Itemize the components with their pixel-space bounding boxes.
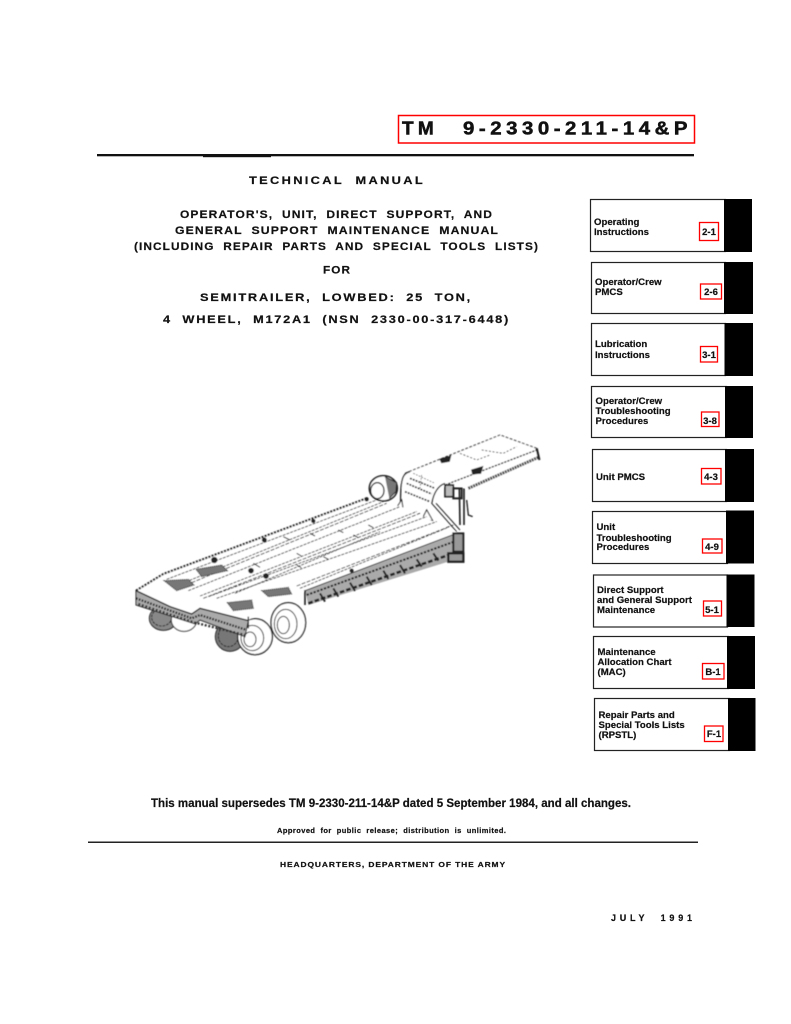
tab: operator/crew PMCS: 2-6 — [704, 287, 718, 298]
manual title: FOR — [323, 264, 351, 276]
tab: lubrication instructions — [592, 323, 753, 376]
deck fittings and wheel wells — [164, 498, 368, 611]
tab: repair parts and special tools lists: Special Tools Lists — [598, 720, 685, 731]
vehicle designation — [163, 292, 510, 326]
tab: operator/crew troubleshooting — [592, 386, 753, 438]
manual title: GENERAL SUPPORT MAINTENANCE MANUAL — [175, 225, 499, 237]
footer rule — [88, 842, 698, 843]
tab: unit troubleshooting — [592, 510, 754, 564]
gooseneck — [395, 435, 539, 532]
document number: 9-2330-211-14&P — [463, 118, 692, 138]
header rule — [97, 154, 694, 157]
tab: direct support and general support: Maintenance — [597, 605, 655, 616]
manual title: OPERATOR'S, UNIT, DIRECT SUPPORT, AND — [180, 209, 493, 221]
supersession notice: This manual supersedes TM 9-2330-211-14&P dated 5 September 1984, and all changes. — [151, 798, 631, 810]
tab: maintenance allocation chart: Maintenance — [598, 647, 656, 658]
document number: TM — [402, 118, 438, 138]
manual title — [134, 209, 539, 276]
document number — [398, 116, 694, 143]
tab: unit troubleshooting: Procedures — [596, 542, 649, 553]
tab: operator/crew troubleshooting: Troubleshooting — [596, 406, 671, 417]
illustration: lowbed semitrailer — [136, 435, 539, 655]
tab: unit PMCS — [592, 449, 754, 502]
vehicle designation: 4 WHEEL, M172A1 (NSN 2330-00-317-6448) — [163, 314, 510, 326]
tab: repair parts and special tools lists: Repair Parts and — [598, 710, 675, 721]
tab: operator/crew troubleshooting: 3-8 — [703, 416, 717, 427]
road wheels — [149, 603, 306, 655]
issuing authority: HEADQUARTERS, DEPARTMENT OF THE ARMY — [280, 860, 506, 869]
tab: lubrication instructions: Lubrication — [595, 339, 647, 350]
tab: direct support and general support: Direct Support — [597, 585, 664, 596]
tab: lubrication instructions: Instructions — [595, 350, 650, 361]
tab: direct support and general support: and General Support — [597, 595, 693, 606]
tab: operating instructions: Instructions — [594, 227, 649, 238]
tab: maintenance allocation chart: (MAC) — [598, 667, 626, 678]
tab: maintenance allocation chart: Allocation Chart — [598, 657, 672, 668]
tab: unit PMCS: 4-3 — [704, 472, 718, 483]
tab: unit troubleshooting: Unit — [596, 522, 616, 533]
tab: lubrication instructions: 3-1 — [702, 350, 717, 361]
tab: repair parts and special tools lists — [594, 698, 756, 751]
tab: repair parts and special tools lists: F-1 — [707, 729, 722, 740]
manual title: (INCLUDING REPAIR PARTS AND SPECIAL TOOLS LISTS) — [134, 241, 539, 253]
tab: operator/crew PMCS: PMCS — [595, 287, 623, 298]
vehicle designation: SEMITRAILER, LOWBED: 25 TON, — [200, 292, 472, 304]
tab: operating instructions: 2-1 — [702, 227, 717, 238]
tab: repair parts and special tools lists: (RPSTL) — [598, 730, 636, 741]
tab: operator/crew PMCS: Operator/Crew — [595, 277, 662, 288]
tab: unit PMCS: Unit PMCS — [596, 472, 646, 483]
heading: technical manual: TECHNICAL MANUAL — [249, 175, 425, 187]
tab: unit troubleshooting: Troubleshooting — [596, 533, 672, 544]
tab: unit troubleshooting: 4-9 — [705, 542, 719, 553]
tab: direct support and general support — [594, 574, 754, 627]
deck — [136, 498, 457, 620]
tab: direct support and general support: 5-1 — [705, 605, 720, 616]
tab: operator/crew troubleshooting: Procedures — [596, 416, 648, 427]
tab: operating instructions: Operating — [594, 217, 639, 228]
spare wheel — [369, 476, 397, 501]
tab: operator/crew troubleshooting: Operator/Crew — [596, 396, 663, 407]
tab: maintenance allocation chart — [594, 636, 755, 689]
tab: maintenance allocation chart: B-1 — [705, 667, 721, 678]
distribution statement: Approved for public release; distribution is unlimited. — [277, 826, 506, 835]
rear and side frame — [136, 533, 463, 637]
tab: operator/crew PMCS — [592, 262, 753, 314]
tab: operating instructions — [590, 199, 752, 252]
publication date: JULY 1991 — [611, 913, 692, 923]
